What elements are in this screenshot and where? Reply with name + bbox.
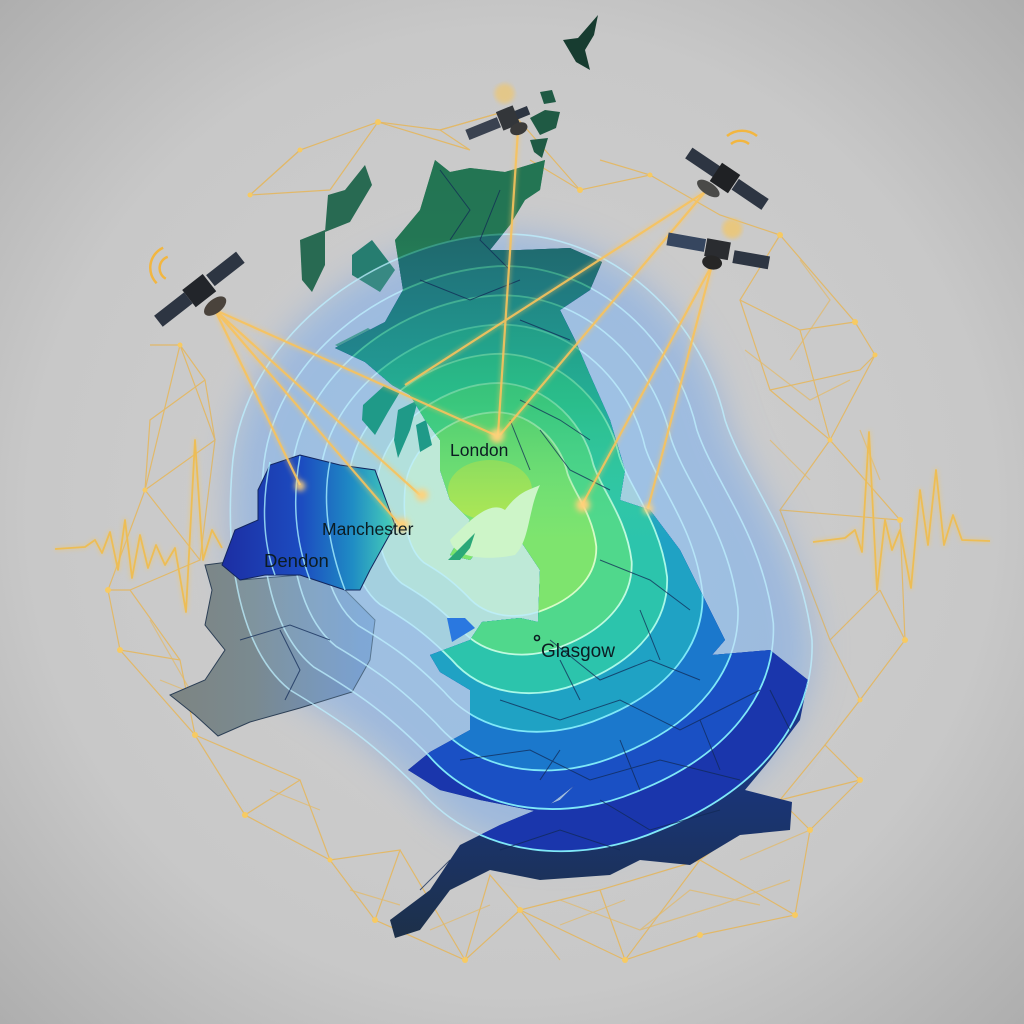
map: Shetland islands [563, 15, 598, 70]
label: Glasgow dot [534, 636, 540, 640]
label: Manchester: Manchester [322, 519, 414, 539]
isle of man [448, 533, 475, 560]
label: Dendon: Dendon [264, 550, 329, 571]
map: Great Britain [335, 160, 808, 938]
satellite: right lower [664, 208, 775, 279]
beam landing points [295, 429, 653, 532]
coverage contours over sea [230, 234, 812, 851]
network nodes [105, 108, 908, 963]
coverage bands on land [335, 160, 808, 852]
anglesey [447, 618, 475, 642]
satellite: top centre [454, 78, 536, 153]
coverage glow [230, 234, 812, 851]
map: Orkney islands [530, 90, 560, 158]
map: Northern Ireland [222, 455, 395, 590]
signal network mesh [108, 110, 905, 960]
label: Glasgow: Glasgow [541, 641, 615, 662]
map: Ireland [170, 562, 375, 736]
irish sea inlet [450, 485, 540, 558]
map: county borders [240, 170, 790, 890]
satellite: top right [675, 106, 797, 225]
satellite: left [124, 213, 259, 345]
map: west coast islands [362, 385, 432, 458]
label: London: London [450, 440, 508, 460]
beams from satellites [215, 130, 712, 525]
waveform: left [55, 440, 222, 612]
waveform: right [813, 432, 990, 590]
map: Hebrides [300, 165, 395, 362]
contour lines over Northern Ireland [265, 456, 345, 590]
labels [264, 440, 615, 662]
